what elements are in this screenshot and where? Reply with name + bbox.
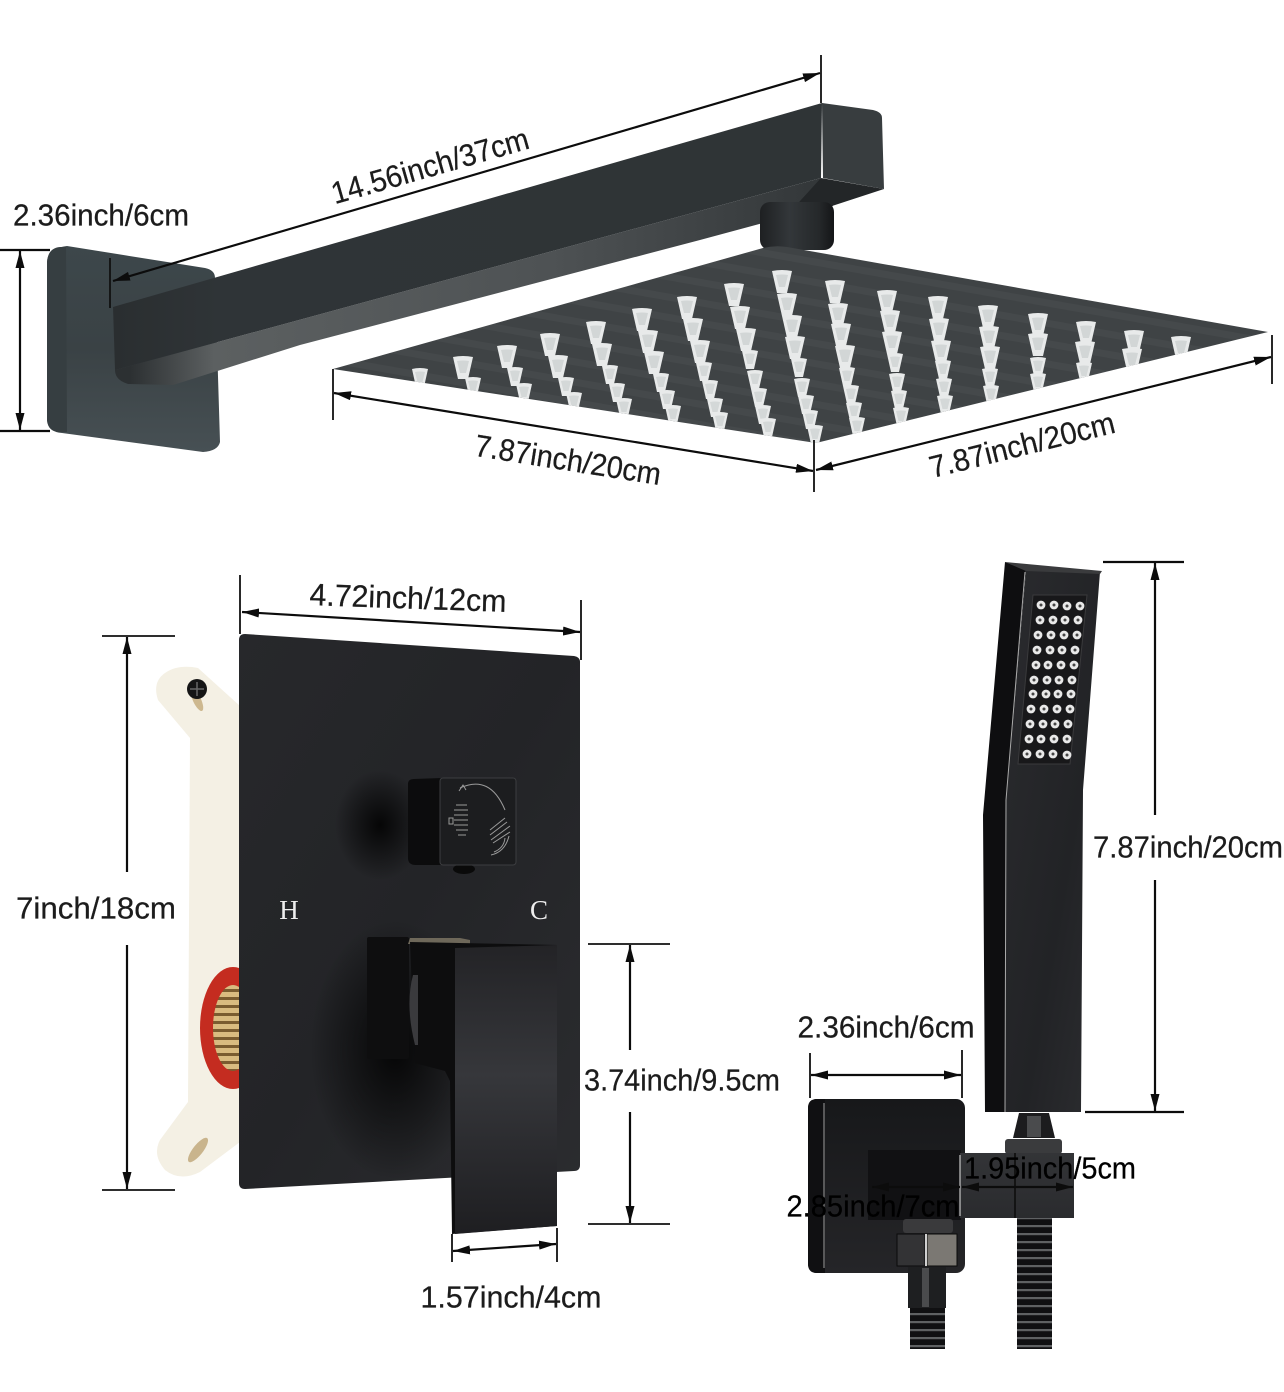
hex nut divider: [925, 1234, 927, 1266]
dimension: 4.72 inch plate width: [240, 575, 581, 660]
upper collar: [903, 1219, 953, 1233]
arm front face: [113, 103, 822, 370]
lever glint: [408, 938, 470, 944]
lower mounting slot: [185, 1135, 211, 1165]
brass thread: [213, 985, 253, 1071]
dimension: 14.56 inch arm length: [110, 55, 821, 308]
rain head plate: [333, 246, 1268, 443]
dimension: 4.72 inch plate width: 4.72inch/12cm: [309, 577, 507, 619]
outlet stem: [908, 1267, 946, 1308]
highlight edge: [1005, 572, 1025, 1112]
dimension: 3.74 inch lever height: 3.74inch/9.5cm: [584, 1062, 780, 1098]
rain head nozzles: [412, 270, 1191, 444]
hand shower front face: [1005, 570, 1100, 1112]
bracket arm: [868, 1150, 961, 1220]
dimension: 7 inch box height: 7inch/18cm: [16, 890, 176, 926]
handle cone: [1013, 1113, 1055, 1138]
dimension: 7.87 inch head left side: 7.87inch/20cm: [472, 428, 664, 492]
hand shower top: [1005, 562, 1102, 574]
hose right: [1017, 1218, 1052, 1349]
outlet plate edge: [808, 1099, 825, 1273]
hand shower side face: [983, 562, 1026, 1112]
shower arm with rain head: [47, 103, 1268, 452]
wall plate edge: [47, 247, 67, 432]
hex nut dark: [897, 1234, 925, 1266]
wall plate: [47, 246, 220, 452]
arm end cap: [822, 103, 884, 189]
spray pad: [1018, 595, 1087, 764]
dimension: 7.87 inch head right side: 7.87inch/20cm: [926, 405, 1118, 485]
dimension: 14.56 inch arm length: 14.56inch/37cm: [327, 121, 533, 211]
C label: C: [530, 895, 548, 925]
dimension: 7.87 inch head left side: [333, 369, 814, 492]
swivel connector: [760, 202, 834, 250]
valve assembly: [156, 634, 580, 1234]
handle collar: [1005, 1139, 1062, 1154]
hose left: [910, 1308, 945, 1349]
dimension: 2.85 inch bracket: 2.85inch/7cm: [786, 1188, 960, 1224]
dimension: 2.36 inch wall plate: 2.36inch/6cm: [13, 198, 189, 232]
arm end underside: [790, 178, 884, 212]
mounting screw: [187, 679, 207, 713]
lever curved detail: [409, 975, 418, 1045]
red inlet seal: [200, 967, 266, 1089]
stem shine: [922, 1268, 929, 1307]
spray nozzles: [1023, 601, 1084, 759]
cone highlight: [1027, 1116, 1041, 1137]
diverter knob face: [440, 778, 516, 865]
outlet plate highlight: [823, 1103, 825, 1268]
diverter symbol: [449, 784, 510, 855]
lever mount block: [367, 937, 409, 1059]
valve cover plate: [239, 634, 580, 1189]
diverter knob side: [408, 778, 442, 865]
plastic rough-in box: [156, 667, 240, 1177]
arm underside: [115, 178, 833, 385]
dimension: 2.36 inch outlet plate width: 2.36inch/6cm: [798, 1010, 974, 1044]
bracket block: [960, 1153, 1074, 1218]
hex nut light: [927, 1234, 957, 1266]
dimension: 7.87 inch head right side: [816, 335, 1272, 485]
bracket highlight: [959, 1155, 961, 1216]
lever shadow: [332, 956, 450, 1149]
diverter knob stem: [453, 864, 475, 874]
lever front face: [455, 945, 557, 1234]
wall outlet plate: [808, 1099, 965, 1273]
dimension: 1.57 inch lever width: [420, 1228, 602, 1314]
lever side: [410, 942, 557, 1234]
hand shower assembly: [808, 562, 1102, 1349]
H label: H: [279, 895, 299, 925]
knob shadow: [335, 770, 425, 880]
dimension: 1.95 inch block: 1.95inch/5cm: [964, 1150, 1136, 1186]
dimension: 1.57 inch lever width: 1.57inch/4cm: [420, 1280, 602, 1314]
